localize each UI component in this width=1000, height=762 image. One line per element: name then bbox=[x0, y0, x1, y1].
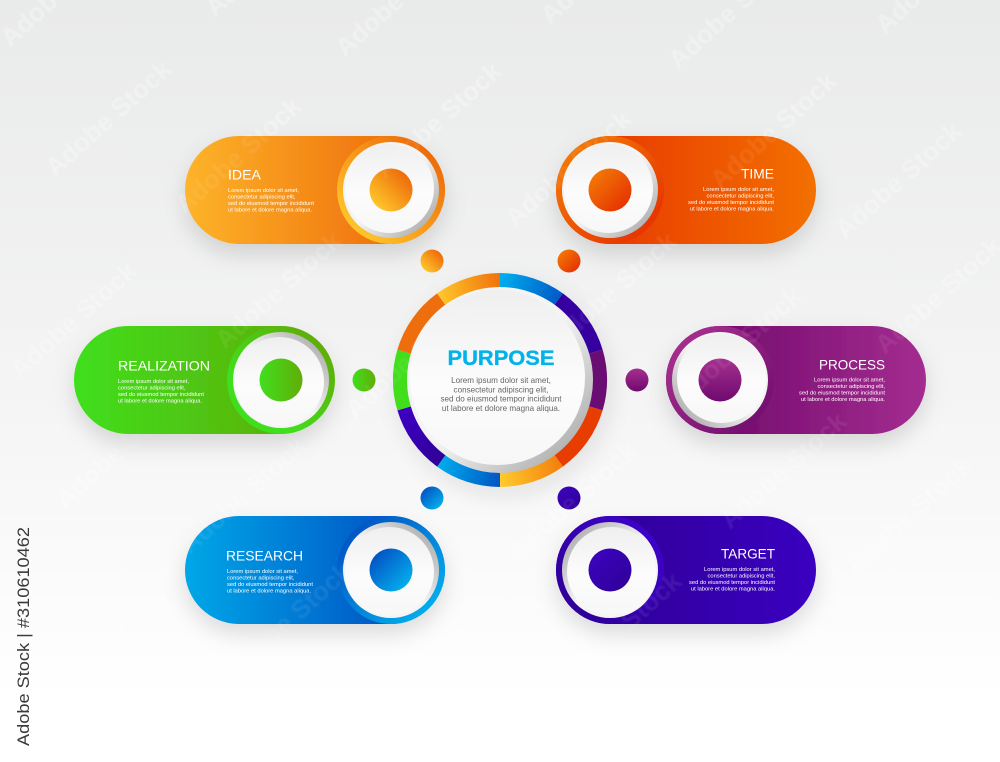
watermark overlay on panels: Adobe Stock bbox=[504, 435, 643, 564]
icon: process button bbox=[666, 326, 774, 434]
text block: research: sed do eiusmod tempor incididunt bbox=[227, 582, 313, 588]
text block: purpose: consectetur adipiscing elit, bbox=[454, 386, 548, 394]
watermark pattern on background: Adobe Stock bbox=[39, 53, 178, 182]
heading: realization: REALIZATION bbox=[118, 358, 210, 374]
heading: idea: IDEA bbox=[228, 166, 262, 182]
watermark pattern on background: Adobe Stock bbox=[839, 450, 978, 579]
icon: time button bbox=[556, 136, 664, 244]
watermark pattern on background: Adobe Stock bbox=[369, 55, 508, 184]
text block: target: Lorem ipsum dolor sit amet, bbox=[704, 567, 775, 573]
watermark overlay on panels: Adobe Stock bbox=[499, 103, 638, 232]
text block: process: consectetur adipiscing elit, bbox=[818, 384, 885, 390]
watermark overlay on panels: Adobe Stock bbox=[704, 65, 843, 194]
text block: idea: consectetur adipiscing elit, bbox=[228, 194, 296, 200]
text block: target: consectetur adipiscing elit, bbox=[708, 574, 775, 580]
text block: realization: Lorem ipsum dolor sit amet, bbox=[118, 379, 189, 385]
text block: process: sed do eiusmod tempor incididunt bbox=[799, 390, 885, 396]
watermark pattern on background: Adobe Stock bbox=[714, 405, 853, 534]
text block: time: consectetur adipiscing elit, bbox=[707, 194, 774, 200]
watermark pattern on background: Adobe Stock bbox=[669, 280, 808, 409]
text block: idea: ut labore et dolore magna aliqua. bbox=[228, 208, 312, 214]
watermark pattern on background: Adobe Stock bbox=[829, 115, 968, 244]
heading: process: PROCESS bbox=[819, 356, 885, 372]
watermark pattern on background: Adobe Stock bbox=[49, 385, 188, 514]
panel: realization bbox=[74, 326, 335, 434]
watermark pattern on background: Adobe Stock bbox=[346, 597, 485, 726]
watermark pattern on background: Adobe Stock bbox=[499, 103, 638, 232]
text block: idea bbox=[228, 188, 314, 214]
watermark pattern on background: Adobe Stock bbox=[339, 295, 478, 424]
text block: research: consectetur adipiscing elit, bbox=[227, 576, 295, 582]
text block: idea: Lorem ipsum dolor sit amet, bbox=[228, 188, 299, 194]
text block: realization bbox=[118, 379, 204, 404]
icon: research button bbox=[337, 516, 445, 624]
watermark overlay on panels: Adobe Stock bbox=[544, 225, 683, 354]
panel: central purpose circle bbox=[400, 280, 600, 480]
watermark overlay on panels: Adobe Stock bbox=[339, 295, 478, 424]
text block: target: ut labore et dolore magna aliqua. bbox=[691, 586, 775, 592]
heading: research: RESEARCH bbox=[226, 548, 303, 564]
segmented ring bbox=[400, 280, 600, 480]
watermark pattern on background: Adobe Stock bbox=[504, 435, 643, 564]
watermark pattern on background: Adobe Stock bbox=[679, 610, 818, 739]
text block: purpose: Lorem ipsum dolor sit amet, bbox=[451, 376, 551, 385]
text block: purpose: ut labore et dolore magna aliqua. bbox=[442, 404, 560, 413]
connector dots bbox=[352, 250, 648, 510]
watermark overlay on panels: Adobe Stock bbox=[369, 55, 508, 184]
text block: research: ut labore et dolore magna aliqua. bbox=[227, 588, 311, 594]
watermark pattern on background: Adobe Stock bbox=[209, 225, 348, 354]
text block: research bbox=[227, 569, 313, 594]
watermark pattern on background: Adobe Stock bbox=[704, 65, 843, 194]
watermark pattern on background: Adobe Stock bbox=[219, 555, 358, 684]
panel: target bbox=[556, 516, 816, 624]
white disc bbox=[407, 287, 593, 473]
text block: realization: consectetur adipiscing elit, bbox=[118, 386, 186, 392]
heading: time: TIME bbox=[741, 166, 774, 182]
watermark pattern on background: Adobe Stock bbox=[169, 90, 308, 219]
text block: research: Lorem ipsum dolor sit amet, bbox=[227, 569, 298, 575]
watermark pattern on background: Adobe Stock bbox=[174, 430, 313, 559]
text block: target: sed do eiusmod tempor incididunt bbox=[689, 580, 775, 586]
heading: purpose: PURPOSE bbox=[448, 346, 554, 370]
watermark pattern on background: Adobe Stock bbox=[14, 590, 153, 719]
text block: process: ut labore et dolore magna aliqua. bbox=[801, 397, 885, 403]
text block: time: sed do eiusmod tempor incididunt bbox=[688, 200, 774, 206]
text block: target bbox=[689, 567, 775, 592]
watermark overlay on panels: Adobe Stock bbox=[669, 280, 808, 409]
text block: process bbox=[799, 378, 885, 403]
panel: time bbox=[556, 136, 816, 244]
icon: idea button bbox=[337, 136, 445, 244]
watermark overlay on panels: Adobe Stock bbox=[209, 225, 348, 354]
icon: realization button bbox=[227, 326, 335, 434]
watermark overlay on panels: Adobe Stock bbox=[549, 565, 688, 694]
watermark overlay on panels: Adobe Stock bbox=[714, 405, 853, 534]
panel: process bbox=[666, 326, 926, 434]
panel: idea bbox=[185, 136, 445, 244]
text block: time: Lorem ipsum dolor sit amet, bbox=[703, 187, 774, 193]
text block: purpose bbox=[440, 376, 562, 413]
watermark overlay on panels: Adobe Stock bbox=[219, 555, 358, 684]
text block: time: ut labore et dolore magna aliqua. bbox=[690, 206, 774, 212]
text block: idea: sed do eiusmod tempor incididunt bbox=[228, 201, 314, 207]
watermark overlay on panels: Adobe Stock bbox=[174, 430, 313, 559]
text block: purpose: sed do eiusmod tempor incididunt bbox=[440, 394, 562, 404]
watermark overlay on panels: Adobe Stock bbox=[169, 90, 308, 219]
watermark pattern on background: Adobe Stock bbox=[4, 255, 143, 384]
stock id label: Adobe Stock | #310610462 bbox=[15, 527, 33, 746]
watermark pattern on background: Adobe Stock bbox=[544, 225, 683, 354]
text block: time bbox=[688, 187, 774, 212]
watermark pattern on background: Adobe Stock bbox=[549, 565, 688, 694]
text block: process: Lorem ipsum dolor sit amet, bbox=[814, 378, 885, 384]
text block: realization: ut labore et dolore magna aliqua. bbox=[118, 398, 202, 404]
watermark overlay on panels: Adobe Stock bbox=[4, 255, 143, 384]
heading: target: TARGET bbox=[721, 546, 775, 562]
icon: target button bbox=[556, 516, 664, 624]
text block: realization: sed do eiusmod tempor incididunt bbox=[118, 392, 204, 398]
panel: research bbox=[185, 516, 445, 624]
